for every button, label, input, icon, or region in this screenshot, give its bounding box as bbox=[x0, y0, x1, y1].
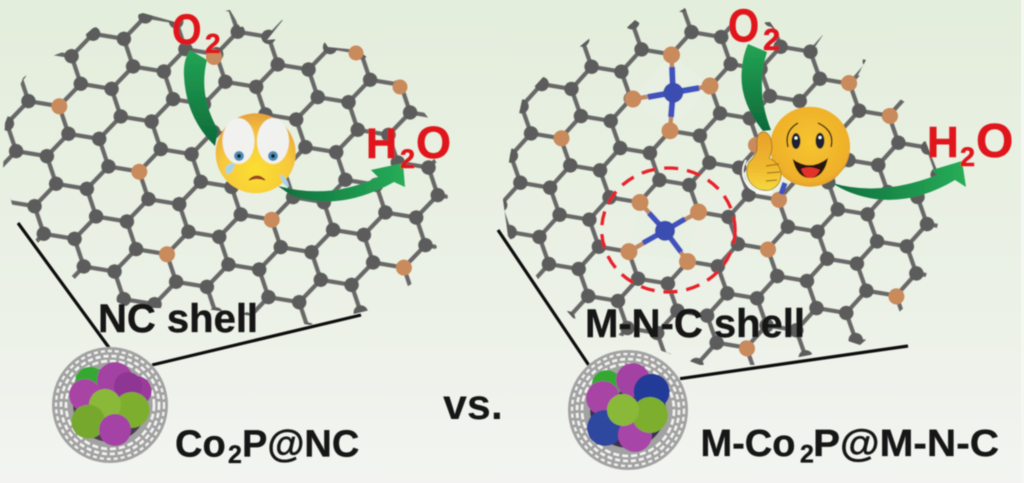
label: H2O: O bbox=[976, 115, 1013, 168]
nanoparticle: M-Co2P@M-N-C bbox=[568, 350, 688, 470]
arrow: O2 in bbox=[741, 44, 771, 131]
M-N4 site: upper bbox=[624, 46, 718, 139]
label: M-Co2P@M-N-C: 2 bbox=[800, 440, 814, 468]
label: M-Co2P@M-N-C: M-Co bbox=[700, 423, 795, 465]
label: M-Co2P@M-N-C bbox=[700, 423, 999, 468]
zoom lines bbox=[498, 230, 908, 379]
nanoparticle: Co2P@NC bbox=[52, 347, 168, 463]
label: Co2P@NC: 2 bbox=[228, 441, 242, 469]
label: Co2P@NC: Co bbox=[175, 424, 226, 466]
right panel: M-N-C shell bbox=[498, 1, 1013, 470]
label: H2O: 2 bbox=[960, 142, 975, 172]
label: H2O bbox=[927, 115, 1013, 172]
zoom lines bbox=[18, 223, 361, 365]
arrow: O2 in bbox=[184, 50, 218, 146]
label: M-N-C shell: M-N-C shell bbox=[585, 302, 805, 346]
label: NC shell: NC shell bbox=[98, 297, 258, 341]
arrow: H2O out bbox=[832, 161, 966, 200]
label: Co2P@NC: P@NC bbox=[242, 424, 359, 466]
label: O2: O bbox=[172, 5, 201, 54]
right edge strip bbox=[1021, 0, 1024, 483]
nitrogen atoms bbox=[51, 46, 412, 276]
label: H2O: 2 bbox=[400, 144, 415, 174]
label: M-Co2P@M-N-C: P@M-N-C bbox=[813, 423, 999, 465]
label: H2O: H bbox=[366, 120, 397, 168]
left panel: NC shell bbox=[3, 5, 451, 469]
blue bond by thumb bbox=[781, 183, 785, 194]
label: O2 bbox=[172, 5, 221, 59]
icon: crying face bbox=[216, 113, 296, 193]
lattice vacancies bbox=[629, 54, 710, 261]
label: O2: O bbox=[728, 1, 759, 52]
M-N4 site: lower bbox=[620, 194, 707, 270]
nitrogen atoms bbox=[554, 75, 904, 356]
vs label: vs. bbox=[443, 381, 503, 429]
label: H2O: H bbox=[927, 118, 959, 167]
graphene lattice: NC bbox=[3, 10, 448, 325]
label: O2 bbox=[728, 1, 780, 57]
label: H2O bbox=[366, 117, 451, 174]
label: O2: 2 bbox=[763, 22, 780, 57]
label: Co2P@NC bbox=[175, 424, 359, 469]
graphene lattice: M-N-C bbox=[503, 8, 945, 365]
arrow: H2O out bbox=[278, 163, 405, 202]
label: O2: 2 bbox=[205, 28, 221, 59]
dashed highlight circle bbox=[602, 168, 735, 292]
icon: smiling face with thumb bbox=[743, 107, 850, 193]
label: H2O: O bbox=[416, 117, 451, 168]
